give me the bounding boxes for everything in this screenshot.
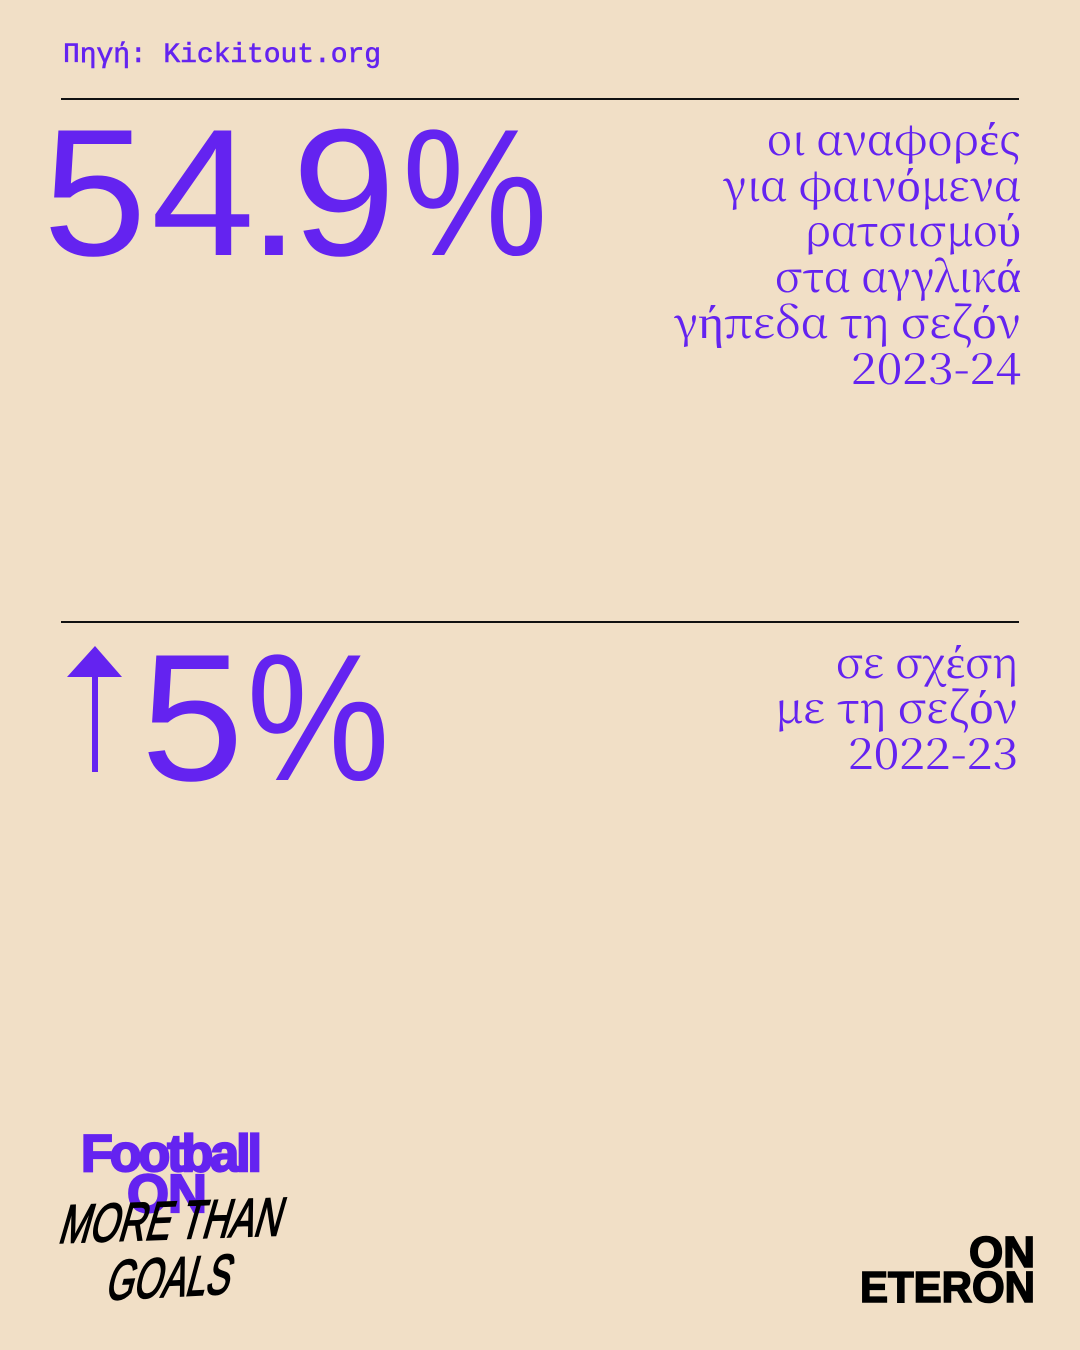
description: season 2023-24: ρατσισμού (805, 198, 1021, 259)
icon: up arrow (67, 646, 122, 772)
description: season 2023-24 (674, 107, 1021, 397)
logo: Football ON More Than Goals: GOALS (101, 1243, 241, 1313)
logo: ON ETERON: ON (969, 1228, 1035, 1277)
logo: ON ETERON: ETERON (860, 1263, 1035, 1312)
logo: Football ON More Than Goals (54, 1125, 293, 1313)
logo: ON ETERON (860, 1228, 1035, 1312)
stat: 5%: 5 (141, 617, 244, 819)
logo: Football ON More Than Goals: Football (81, 1125, 262, 1183)
description: season 2023-24: στα αγγλικά (775, 244, 1021, 305)
description: compared with 2022-23: 2022-23 (848, 721, 1018, 782)
source line: Πηγή: Kickitout.org (63, 40, 381, 71)
description: season 2023-24: 2023-24 (851, 336, 1021, 397)
big stat: 54.9%: % (402, 92, 548, 294)
description: season 2023-24: οι αναφορές (767, 107, 1021, 168)
big stat: 54.9%: 54.9 (43, 91, 396, 293)
description: compared with 2022-23: σε σχέση (836, 630, 1018, 691)
stat: 5% (141, 617, 390, 819)
description: compared with 2022-23: με τη σεζόν (775, 675, 1018, 736)
logo: Football ON More Than Goals: MORE THAN (54, 1186, 293, 1255)
description: season 2023-24: γήπεδα τη σεζόν (674, 290, 1021, 351)
description: season 2023-24: για φαινόμενα (723, 153, 1021, 214)
description: compared with 2022-23 (775, 630, 1018, 782)
stat: 5%: % (246, 617, 390, 819)
logo: Football ON More Than Goals: ON (127, 1164, 207, 1224)
big stat: 54.9% (43, 91, 548, 294)
